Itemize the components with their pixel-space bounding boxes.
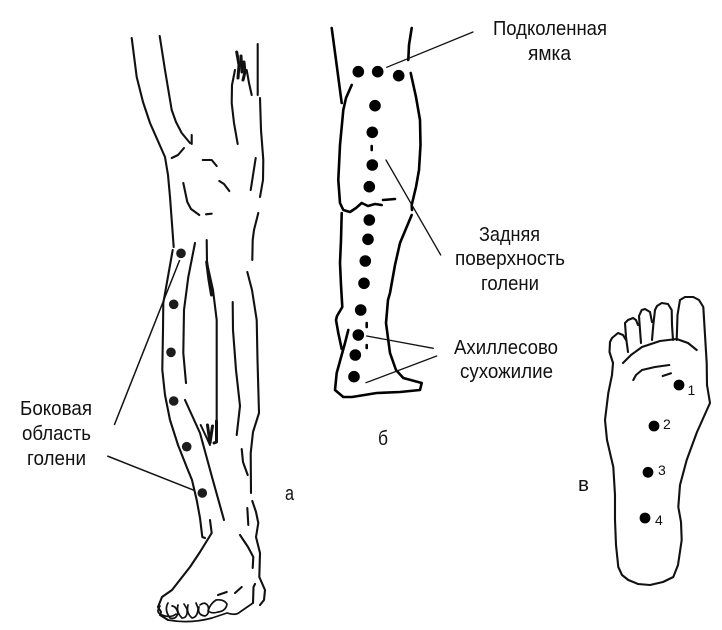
- foot point numbers: 1: [688, 382, 696, 398]
- leg a outline: [132, 36, 265, 620]
- foot point numbers: 4: [655, 512, 663, 528]
- foot outline: [605, 297, 710, 585]
- label: lateral area of the shin: Боковая: [20, 397, 92, 420]
- label: posterior surface of the shin: голени: [481, 272, 539, 295]
- caption b: б: [378, 427, 388, 450]
- leg b outline: [332, 28, 422, 397]
- label: lateral area of the shin: голени: [27, 447, 86, 470]
- leader lines: lateral area: [107, 260, 195, 491]
- leg a acupuncture points: [166, 248, 207, 498]
- label: popliteal fossa: [493, 17, 607, 65]
- label: lateral area of the shin: область: [22, 422, 91, 445]
- label: posterior surface of the shin: Задняя: [479, 223, 540, 246]
- foot sole drawing: [605, 297, 710, 585]
- leg a toes: [158, 600, 253, 622]
- leg a: front view drawing: [132, 36, 265, 622]
- caption a: а: [285, 482, 294, 505]
- label: achilles tendon: Ахиллесово: [454, 336, 558, 359]
- leg b: back view drawing: [332, 28, 422, 397]
- label: achilles tendon: сухожилие: [460, 360, 553, 383]
- foot point numbers: 3: [658, 462, 666, 478]
- foot points: [640, 380, 684, 523]
- label: popliteal fossa: ямка: [528, 42, 572, 65]
- foot point numbers: 2: [663, 416, 671, 432]
- label: posterior surface of the shin: поверхность: [455, 247, 565, 270]
- label: popliteal fossa: Подколенная: [493, 17, 607, 40]
- label: lateral area of the shin: [20, 397, 92, 470]
- label: achilles tendon: [454, 336, 558, 383]
- foot point numbers: [655, 382, 696, 528]
- caption v: в: [578, 473, 589, 496]
- leg b points: [348, 66, 405, 383]
- label: posterior surface of the shin: [455, 223, 565, 295]
- leader lines: leg b: [366, 32, 473, 383]
- leg a dark hair and shading: [201, 52, 245, 445]
